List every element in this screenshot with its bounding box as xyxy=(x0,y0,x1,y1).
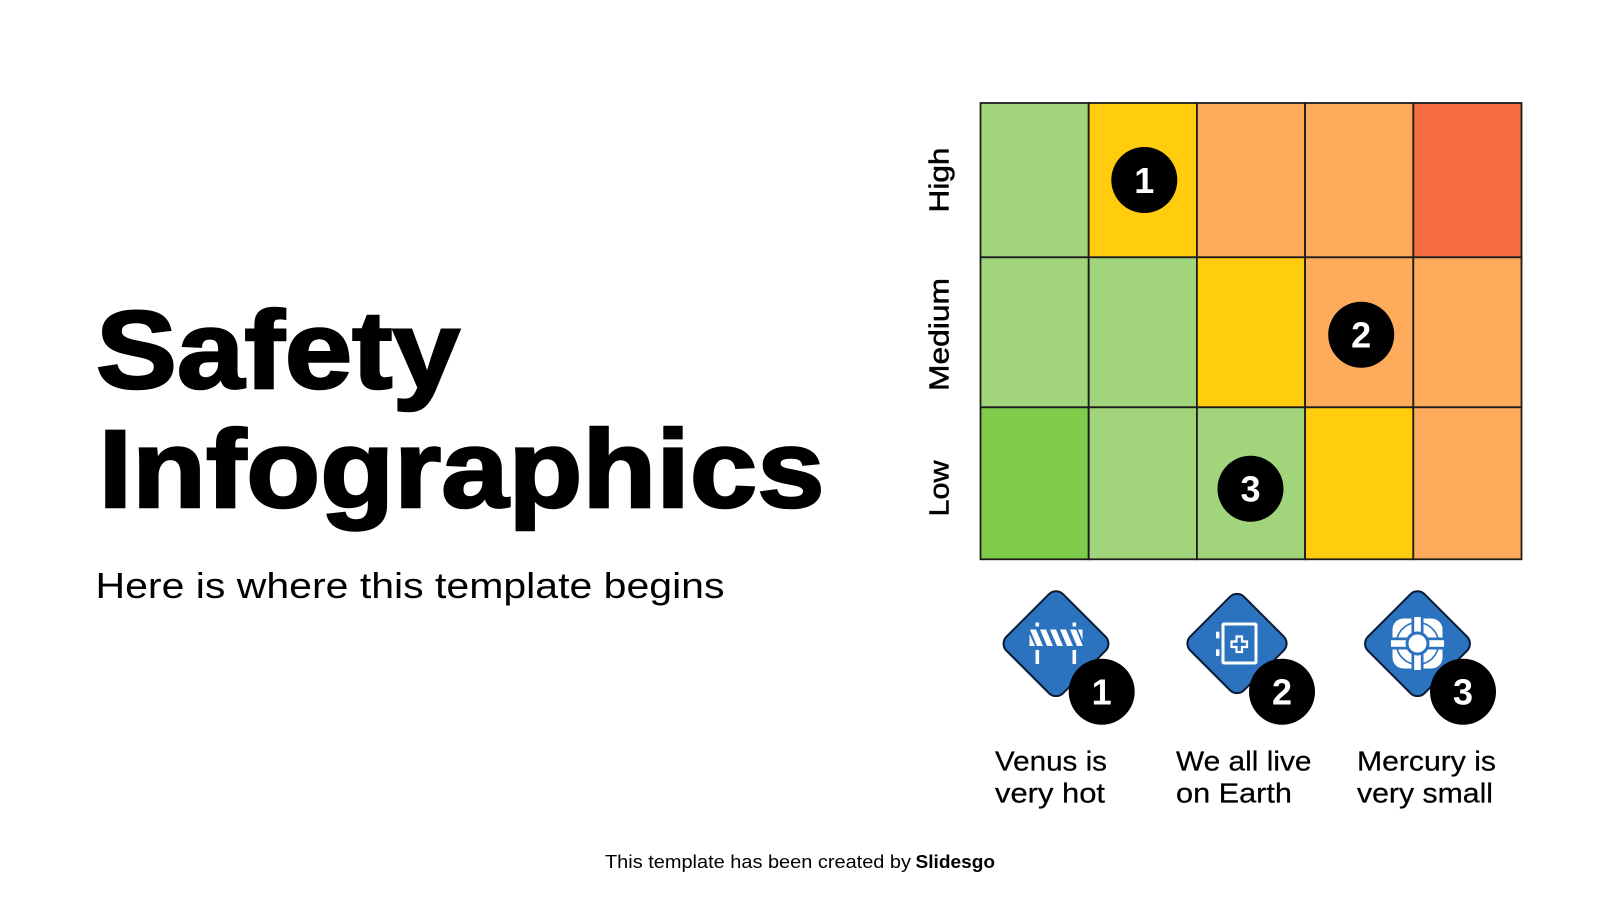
legend item 2 xyxy=(1176,590,1315,808)
footer credit: This template has been created by xyxy=(605,852,911,872)
risk matrix xyxy=(924,103,1522,559)
number badge 2 xyxy=(1249,659,1315,725)
caption 2: on Earth xyxy=(1176,778,1292,808)
title xyxy=(96,289,824,531)
number badge 2: 2 xyxy=(1272,672,1292,712)
matrix cells xyxy=(980,103,1522,559)
title: Infographics xyxy=(98,408,824,531)
number badge 1: 1 xyxy=(1092,672,1112,712)
number badge 1 xyxy=(1069,659,1135,725)
row labels: Medium xyxy=(924,278,954,391)
footer credit: Slidesgo xyxy=(916,852,995,872)
subtitle: Here is where this template begins xyxy=(96,565,724,606)
legend item 3 xyxy=(1357,587,1496,808)
caption 3 xyxy=(1357,746,1496,808)
caption 1 xyxy=(995,746,1107,808)
matrix marker 3: 3 xyxy=(1240,468,1261,510)
number badge 3: 3 xyxy=(1453,672,1473,712)
caption 1: Venus is xyxy=(995,746,1107,776)
caption 2: We all live xyxy=(1176,746,1312,776)
row labels: Low xyxy=(924,460,954,516)
caption 2 xyxy=(1176,746,1312,808)
caption 3: very small xyxy=(1357,778,1493,808)
matrix marker 2 xyxy=(1328,302,1394,368)
title: Safety xyxy=(96,289,460,412)
legend item 1 xyxy=(995,587,1135,808)
row labels: High xyxy=(924,148,954,212)
caption 1: very hot xyxy=(995,778,1105,808)
matrix marker 1 xyxy=(1111,147,1177,213)
icon: lifebuoy xyxy=(1361,587,1474,700)
matrix marker 3 xyxy=(1218,456,1284,522)
matrix marker 2: 2 xyxy=(1351,314,1371,356)
matrix marker 1: 1 xyxy=(1134,160,1154,201)
icon: road barrier xyxy=(999,587,1113,700)
caption 3: Mercury is xyxy=(1357,746,1496,776)
icon: medical cabinet xyxy=(1183,590,1291,697)
number badge 3 xyxy=(1430,659,1496,725)
row labels xyxy=(924,148,954,516)
